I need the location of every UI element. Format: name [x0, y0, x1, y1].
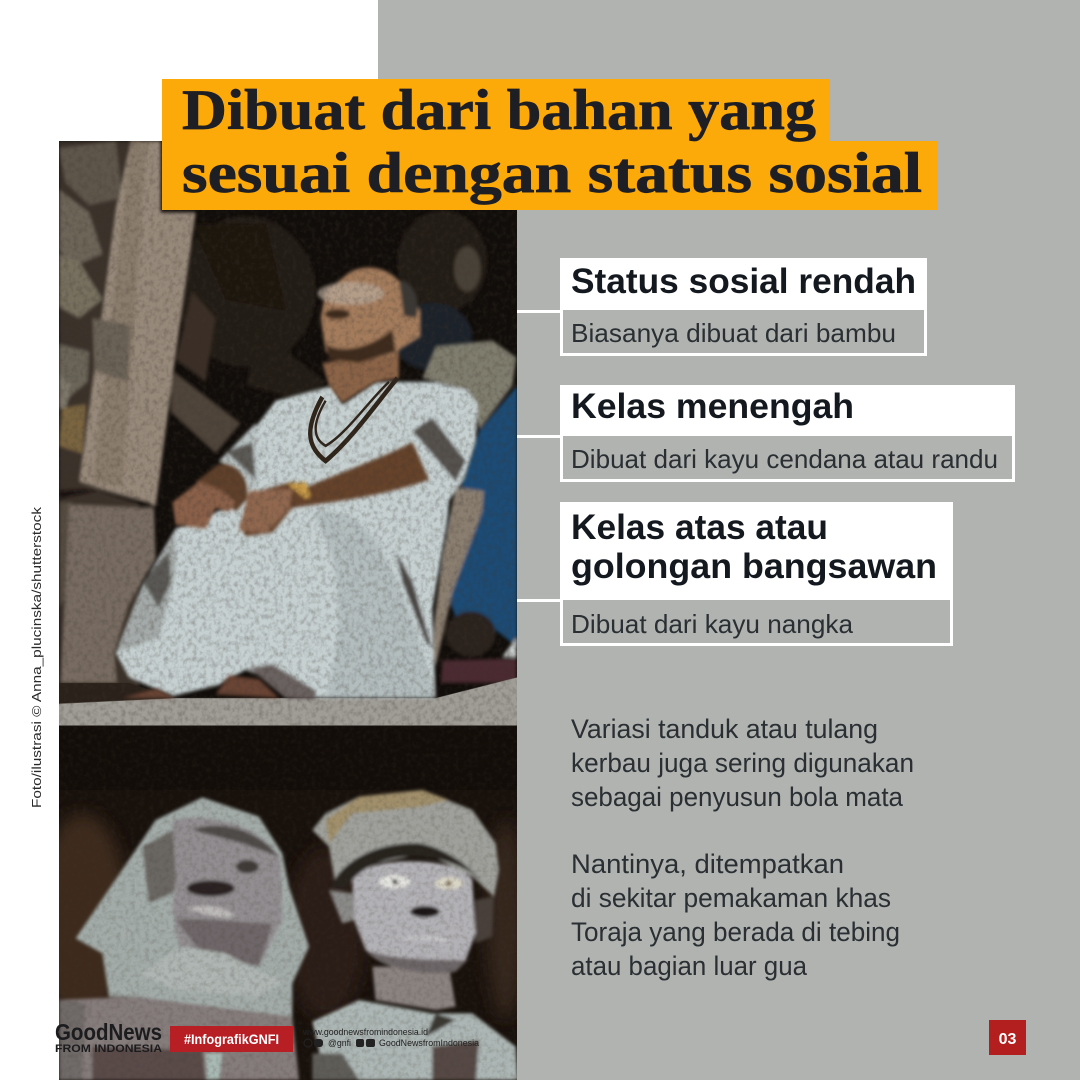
card: status sosial rendah	[517, 258, 927, 356]
photo credit: Foto/ilustrasi © Anna_plucinska/shutterstock	[30, 506, 44, 808]
card: kelas atas	[517, 502, 953, 646]
title line 2: sesuai dengan status sosial	[182, 142, 922, 205]
paragraph: nantinya: Nantinya, ditempatkan	[571, 849, 844, 879]
cave background glow	[36, 727, 526, 1027]
hashtag tag: #InfografikGNFI	[184, 1032, 279, 1047]
title highlight bars	[162, 79, 938, 210]
texture overlay	[59, 727, 519, 1080]
paragraph: variasi tanduk	[571, 714, 914, 812]
logo: GoodNews from Indonesia: FROM INDONESIA	[55, 1043, 162, 1055]
website and social handles	[302, 1027, 480, 1049]
right statue	[312, 790, 518, 1080]
photo: two wooden statues	[36, 727, 526, 1080]
paragraph: nantinya: Toraja yang berada di tebing	[571, 917, 900, 947]
handle: @gnfi	[328, 1038, 351, 1049]
blue cloth and chair	[422, 340, 517, 683]
channel name: GoodNewsfromIndonesia	[379, 1038, 480, 1049]
connector line	[517, 310, 560, 313]
stone ledge	[59, 678, 517, 726]
subheading background	[563, 436, 1012, 479]
title line 1: Dibuat dari bahan yang	[182, 79, 816, 142]
card text: Dibuat dari kayu cendana atau randu	[571, 444, 998, 474]
social icons	[304, 1039, 375, 1047]
left statue	[59, 797, 309, 1080]
hashtag tag	[170, 1026, 293, 1052]
skin: arms, hands, feet	[122, 442, 429, 698]
texture overlay	[59, 141, 519, 727]
card heading: Kelas atas atau	[571, 508, 828, 547]
paragraph: variasi tanduk: Variasi tanduk atau tulang	[571, 714, 878, 744]
photo: seated tau-tau statue	[59, 141, 519, 732]
card heading: Status sosial rendah	[571, 262, 916, 301]
card frame	[560, 385, 1015, 482]
grey background panel	[378, 0, 1080, 1080]
logo: GoodNews from Indonesia	[55, 1019, 162, 1055]
subheading background	[563, 310, 924, 353]
card text: Dibuat dari kayu nangka	[571, 609, 854, 639]
subheading background	[563, 600, 950, 643]
card frame	[560, 258, 927, 356]
stone wall	[59, 141, 487, 690]
card heading	[571, 508, 937, 586]
paragraph: variasi tanduk: sebagai penyusun bola mata	[571, 782, 903, 812]
card: kelas menengah	[517, 385, 1015, 482]
head and neck	[317, 268, 421, 403]
white dress	[116, 382, 478, 700]
card text: Biasanya dibuat dari bambu	[571, 318, 896, 348]
connector line	[517, 435, 560, 438]
page number	[989, 1020, 1026, 1055]
logo: GoodNews from Indonesia: GoodNews	[55, 1019, 162, 1045]
card frame	[560, 502, 953, 646]
website: www.goodnewsfromindonesia.id	[302, 1027, 428, 1038]
title	[182, 79, 922, 205]
card heading: Kelas menengah	[571, 387, 854, 426]
card heading: golongan bangsawan	[571, 547, 937, 586]
wooden post	[59, 141, 241, 683]
paragraph: nantinya: atau bagian luar gua	[571, 951, 807, 981]
paragraph: variasi tanduk: kerbau juga sering digunakan	[571, 748, 914, 778]
paragraph: nantinya	[571, 849, 900, 981]
page number: 03	[999, 1031, 1016, 1048]
connector line	[517, 599, 560, 602]
paragraph: nantinya: di sekitar pemakaman khas	[571, 883, 891, 913]
necklace	[310, 378, 397, 461]
